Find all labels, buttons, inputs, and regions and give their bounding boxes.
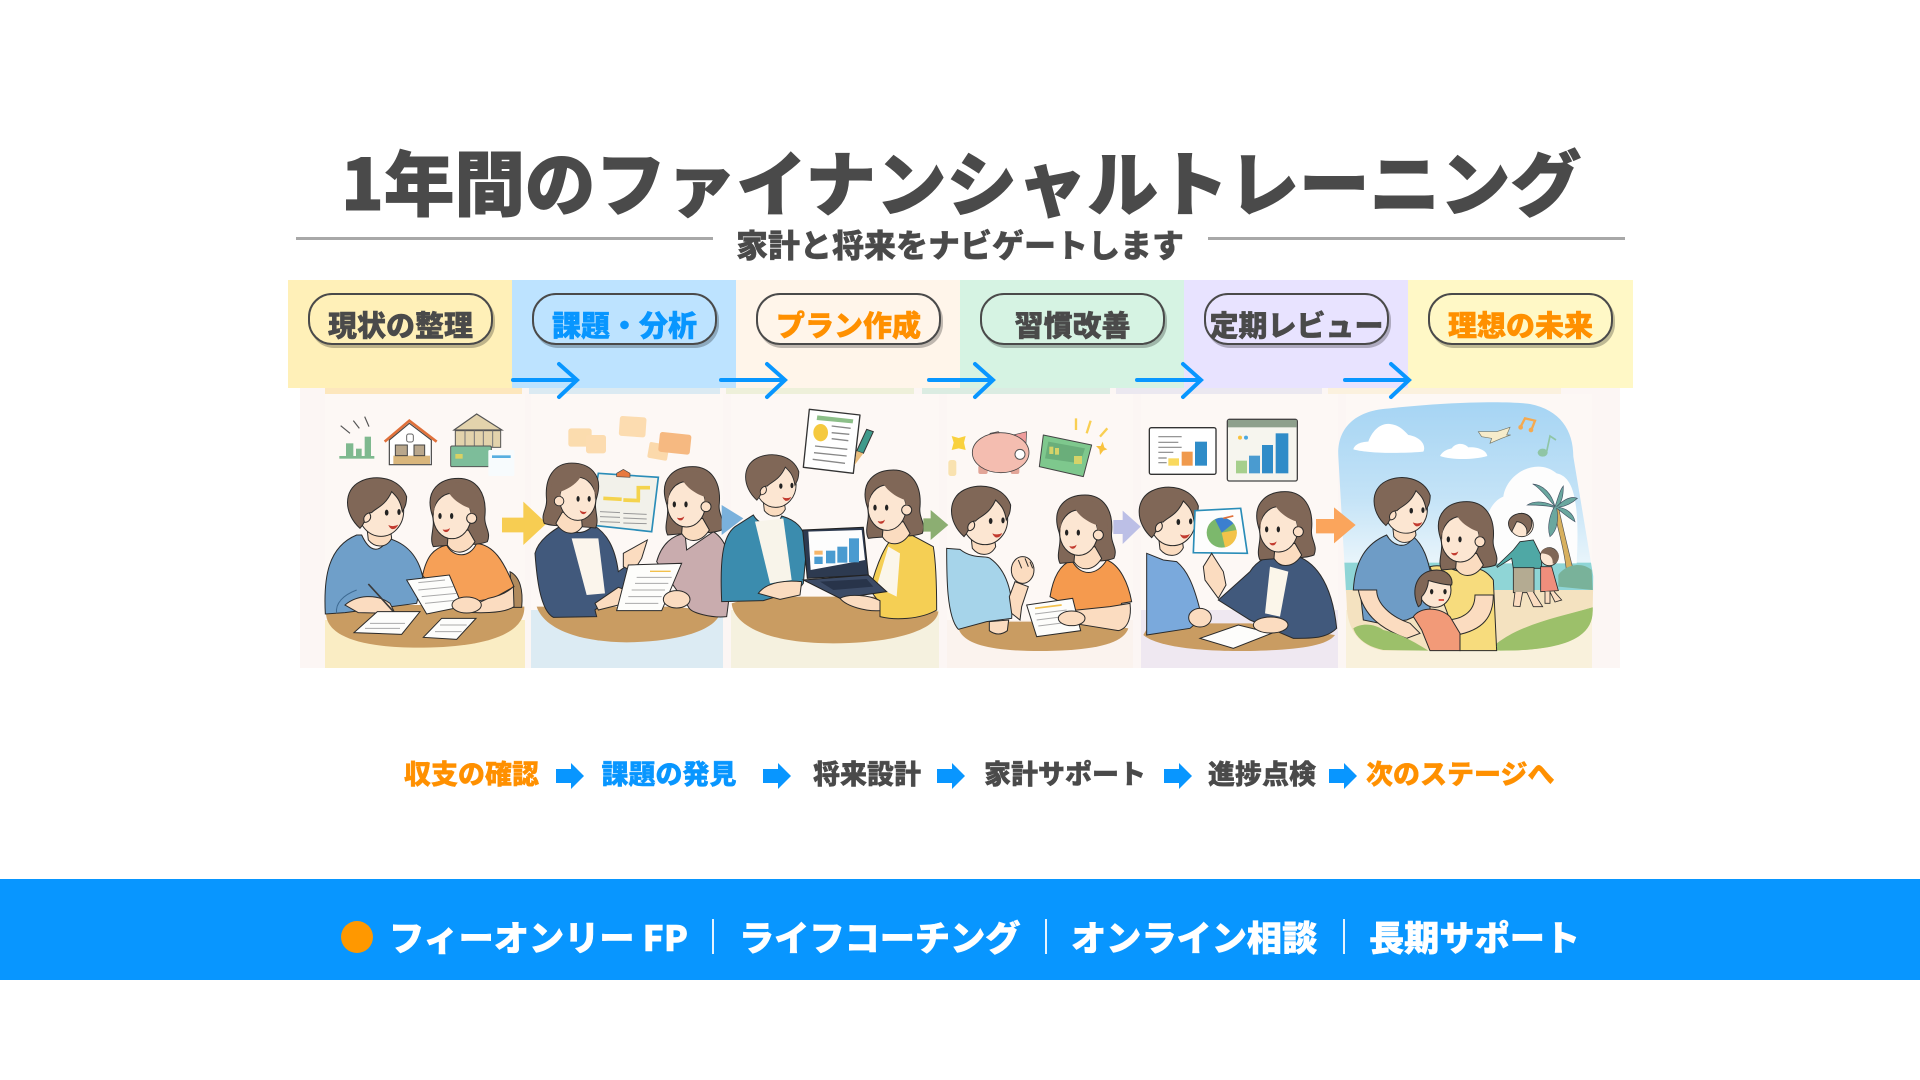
child in coral outfit	[1413, 570, 1460, 651]
icon: airplane	[1478, 427, 1511, 443]
table	[732, 597, 938, 643]
clouds	[1353, 424, 1487, 459]
stage header: 課題・分析	[512, 280, 736, 388]
icon: piggy bank	[972, 432, 1029, 474]
divider	[712, 919, 714, 954]
footer item: フィーオンリー FP: フィーオンリー FP	[389, 911, 688, 962]
flow label: 将来設計: 将来設計	[813, 752, 921, 792]
arrow 5	[1345, 364, 1409, 397]
woman in orange tee	[1050, 495, 1132, 631]
icon: green card	[1039, 435, 1092, 477]
table	[326, 605, 524, 648]
adviser in navy jacket	[1200, 492, 1337, 648]
scene 3: making a plan with laptop	[721, 409, 938, 643]
table	[958, 622, 1128, 651]
woman in orange shirt	[423, 478, 514, 613]
table	[537, 607, 721, 642]
subtitle rule right	[1208, 237, 1625, 240]
footer item: オンライン相談: オンライン相談	[1071, 911, 1317, 962]
arrow: green	[923, 510, 948, 540]
chair	[510, 572, 522, 607]
scene 6: ideal future, family at the beach	[1337, 400, 1597, 653]
flow label: 進捗点検: 進捗点検	[1208, 752, 1316, 792]
flow arrow 3	[937, 763, 965, 789]
stage header: 理想の未来	[1408, 280, 1633, 388]
flow arrows	[556, 763, 1357, 789]
flow label: 家計サポート: 家計サポート	[984, 752, 1146, 792]
icon: house	[385, 421, 437, 465]
palm tree	[1527, 484, 1593, 590]
scene 1: couple reviewing household documents	[325, 414, 524, 648]
plan document icon	[803, 409, 873, 473]
laptop with bar chart	[803, 527, 887, 611]
stage header: プラン作成	[736, 280, 960, 388]
arrow 1	[513, 364, 577, 397]
sticky notes	[568, 416, 692, 461]
man in teal cardigan	[721, 455, 807, 602]
arrow 3	[929, 364, 993, 397]
flow arrow 1	[556, 763, 584, 789]
note sheet	[1027, 598, 1085, 637]
stage pill: プラン作成	[776, 302, 921, 344]
scene 5: periodic review	[1139, 419, 1337, 651]
footer band	[0, 879, 1920, 980]
arrow: yellow	[502, 502, 547, 545]
flow label: 次のステージへ: 次のステージへ	[1366, 752, 1554, 792]
divider	[1343, 919, 1345, 954]
man in blue sweater	[325, 478, 423, 614]
table	[1143, 623, 1335, 651]
flow label: 収支の確認: 収支の確認	[404, 752, 539, 792]
client in pink cardigan	[657, 467, 730, 617]
footer item: ライフコーチング: ライフコーチング	[739, 911, 1020, 962]
arrow 4	[1137, 364, 1201, 397]
stage pill	[756, 293, 941, 345]
man in light blue shirt	[947, 486, 1034, 634]
stage pill: 理想の未来	[1448, 302, 1593, 344]
foreground grass	[1353, 607, 1593, 651]
illustration strip	[300, 388, 1620, 668]
woman in yellow cardigan	[865, 470, 937, 619]
stage pill: 定期レビュー	[1209, 302, 1384, 344]
beach backdrop	[1337, 400, 1597, 653]
footer item: 長期サポート: 長期サポート	[1369, 911, 1580, 962]
children on the beach	[1497, 513, 1562, 607]
client in blue sweater	[1139, 487, 1211, 635]
stage pill: 現状の整理	[328, 302, 473, 344]
stage header: 定期レビュー	[1184, 280, 1408, 388]
stage pill: 課題・分析	[552, 302, 697, 344]
flow arrow 2	[763, 763, 791, 789]
clipboard	[590, 469, 658, 532]
arrow: blue	[722, 505, 743, 535]
icon: rising bars	[339, 417, 374, 459]
orange dot	[341, 921, 373, 953]
sparkles	[948, 418, 1107, 476]
stage header: 習慣改善	[960, 280, 1184, 388]
stage pill	[308, 293, 493, 345]
column backgrounds	[300, 388, 1620, 668]
arrow: orange	[1316, 507, 1356, 543]
icon: bank and cards	[451, 414, 514, 476]
documents on table	[345, 575, 481, 639]
mother in yellow dress	[1430, 502, 1497, 651]
dashboard chart card	[1227, 419, 1297, 481]
report sheet	[617, 563, 690, 611]
stage pill	[532, 293, 717, 345]
scene 2: adviser analysing issues	[535, 416, 730, 642]
adviser in navy jacket	[535, 463, 647, 617]
stage pill: 習慣改善	[1014, 302, 1130, 344]
flow arrow 4	[1164, 763, 1192, 789]
stage pill	[1428, 293, 1613, 345]
tablet with pie chart	[1193, 508, 1247, 553]
flow label: 課題の発見: 課題の発見	[602, 752, 736, 792]
stage header: 現状の整理	[288, 280, 512, 388]
stage pill	[980, 293, 1165, 345]
title: 1年間のファイナンシャルトレーニング	[341, 129, 1581, 231]
arrow 2	[721, 364, 785, 397]
report chart card	[1149, 428, 1216, 474]
arrow: lavender	[1113, 511, 1141, 544]
subtitle: 家計と将来をナビゲートします	[736, 220, 1184, 266]
divider	[1045, 919, 1047, 954]
subtitle rule left	[296, 237, 713, 240]
flow arrow 5	[1329, 763, 1357, 789]
father in blue tee	[1353, 478, 1430, 638]
icon: music notes	[1518, 418, 1556, 457]
scene 4: habit improvement	[947, 418, 1132, 651]
